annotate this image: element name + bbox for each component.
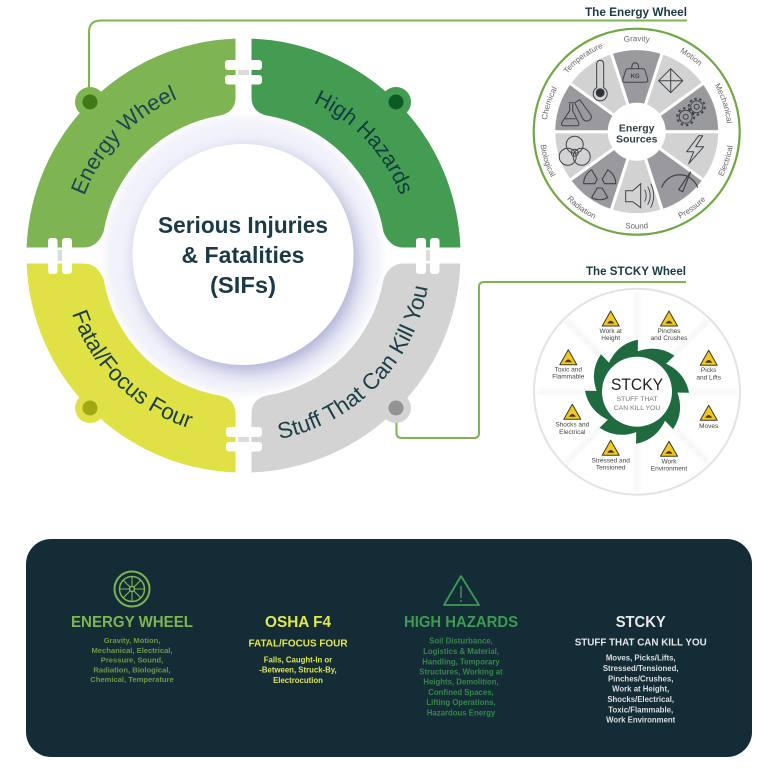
icon: flask and test tube <box>561 100 591 126</box>
STCKY item labels: Shocks and <box>555 422 590 429</box>
title: Serious Injuries <box>158 212 328 238</box>
column: High Hazards: Soil Disturbance, <box>429 637 493 646</box>
column: STCKY: Pinches/Crushes, <box>608 674 673 683</box>
STCKY warning icons <box>560 311 717 456</box>
column: STCKY: Work Environment <box>606 715 676 724</box>
column: OSHA F4 <box>248 614 348 685</box>
title: & Fatalities <box>182 242 304 268</box>
wheel labels: Pressure <box>678 198 705 218</box>
STCKY item labels: Work at <box>600 328 622 335</box>
segment joiners <box>48 60 440 452</box>
column: High Hazards: Confined Spaces, <box>428 688 494 697</box>
STCKY item labels: Electrical <box>559 429 586 436</box>
STCKY item labels: Moves <box>699 423 719 430</box>
heading: The STCKY Wheel: The STCKY Wheel <box>586 264 686 278</box>
column: Energy Wheel: Gravity, Motion, <box>104 636 160 645</box>
STCKY item labels: Pinches <box>657 328 681 335</box>
column: Energy Wheel: Pressure, Sound, <box>101 656 163 665</box>
label: Fatal/Focus Four: Fatal/Focus Four <box>72 310 193 427</box>
column: High Hazards: Heights, Demolition, <box>423 678 499 687</box>
icon: gears <box>677 99 705 125</box>
centre text <box>611 375 663 412</box>
segment: High Hazards <box>252 39 460 247</box>
heading: The Energy Wheel: The Energy Wheel <box>585 5 687 19</box>
icon: lightning <box>687 136 704 164</box>
panel: summary <box>26 539 752 757</box>
STCKY item labels <box>552 328 722 473</box>
column: OSHA F4: -Between, Struck-By, <box>259 666 337 675</box>
centre label <box>616 123 658 146</box>
centre text: STCKY <box>611 375 663 394</box>
column: STCKY <box>575 614 707 724</box>
column: Energy Wheel: Mechanical, Electrical, <box>91 646 173 655</box>
centre label: Sources <box>616 134 658 146</box>
wheel labels: Temperature <box>563 44 602 72</box>
segment: Stuff That Can Kill You <box>252 264 460 472</box>
centre label: Energy <box>619 123 655 135</box>
spokes <box>537 292 737 492</box>
connector: STCKY wheel <box>396 282 686 438</box>
title: (SIFs) <box>210 272 276 298</box>
column: STCKY: Toxic/Flammable, <box>608 705 673 714</box>
column: High Hazards: Hazardous Energy <box>427 708 496 717</box>
centre text: CAN KILL YOU <box>614 405 660 412</box>
label: High Hazards: High Hazards <box>315 90 410 194</box>
column: Energy Wheel: ENERGY WHEEL <box>71 614 193 631</box>
icon: speaker <box>626 184 654 208</box>
saw gear <box>580 334 694 449</box>
column: High Hazards <box>404 576 518 717</box>
icon: motion diamond <box>659 69 683 93</box>
STCKY item labels: Environment <box>651 466 687 473</box>
label: Stuff That Can Kill You: Stuff That Can Kill You <box>278 286 428 438</box>
column: High Hazards: HIGH HAZARDS <box>404 614 518 631</box>
icon: weight <box>623 63 648 82</box>
wheel labels: Motion <box>680 48 702 66</box>
column: High Hazards: Lifting Operations, <box>426 698 496 707</box>
STCKY item labels: Toxic and <box>555 366 582 373</box>
connector: energy wheel <box>89 20 687 95</box>
column: STCKY: Stressed/Tensioned, <box>603 664 679 673</box>
STCKY item labels: Height <box>601 335 620 342</box>
STCKY item labels: Work <box>661 458 677 465</box>
icon: wheel <box>114 572 150 606</box>
icon: radiation <box>582 169 618 200</box>
STCKY item labels: and Crushes <box>651 335 688 342</box>
wheel labels <box>540 36 733 229</box>
title <box>158 212 328 298</box>
column: Energy Wheel <box>71 572 193 684</box>
energy wheel <box>532 28 741 236</box>
column: STCKY: STUFF THAT CAN KILL YOU <box>575 636 707 648</box>
segment: Fatal/Focus Four <box>27 264 235 472</box>
column: OSHA F4: Falls, Caught-In or <box>264 655 332 664</box>
wedges <box>550 49 723 215</box>
wheel labels: Radiation <box>567 196 596 219</box>
column: STCKY: Shocks/Electrical, <box>607 695 674 704</box>
column: High Hazards: Handling, Temporary <box>422 657 500 666</box>
column: High Hazards: Logistics & Material, <box>423 647 499 656</box>
icons <box>559 60 705 208</box>
central circular backdrop <box>106 118 382 394</box>
column: OSHA F4: FATAL/FOCUS FOUR <box>248 638 348 650</box>
wheel labels: Sound <box>626 222 648 229</box>
column: STCKY: STCKY <box>616 614 666 631</box>
icon: weight: KG <box>631 74 640 80</box>
STCKY item labels: and Lifts <box>696 374 722 381</box>
centre text: STUFF THAT <box>617 396 657 403</box>
column: High Hazards: Structures, Working at <box>419 667 503 676</box>
STCKY wheel <box>534 289 740 495</box>
column: Energy Wheel: Chemical, Temperature <box>90 675 174 684</box>
icon: gauge <box>662 172 698 192</box>
wheel labels: Gravity <box>624 36 650 44</box>
wheel labels: Electrical <box>718 146 733 176</box>
STCKY item labels: Tensioned <box>596 465 626 472</box>
wheel labels: Biological <box>540 144 556 177</box>
STCKY item labels: Flammable <box>552 374 585 381</box>
wheel labels: Mechanical <box>714 83 732 123</box>
STCKY item labels: Picks <box>701 367 717 374</box>
column: STCKY: Work at Height, <box>612 685 669 694</box>
column: Energy Wheel: Radiation, Biological, <box>93 665 171 674</box>
column: STCKY: Moves, Picks/Lifts, <box>606 654 676 663</box>
column: OSHA F4: Electrocution <box>273 676 323 685</box>
icon: thermometer <box>593 60 607 101</box>
icon: warning triangle <box>444 576 479 605</box>
column: OSHA F4: OSHA F4 <box>265 614 331 631</box>
label: Energy Wheel: Energy Wheel <box>71 84 176 194</box>
icon: biohazard <box>559 136 590 165</box>
STCKY item labels: Stressed and <box>592 457 630 464</box>
segment: Energy Wheel <box>27 39 235 247</box>
wheel labels: Chemical <box>542 86 557 120</box>
